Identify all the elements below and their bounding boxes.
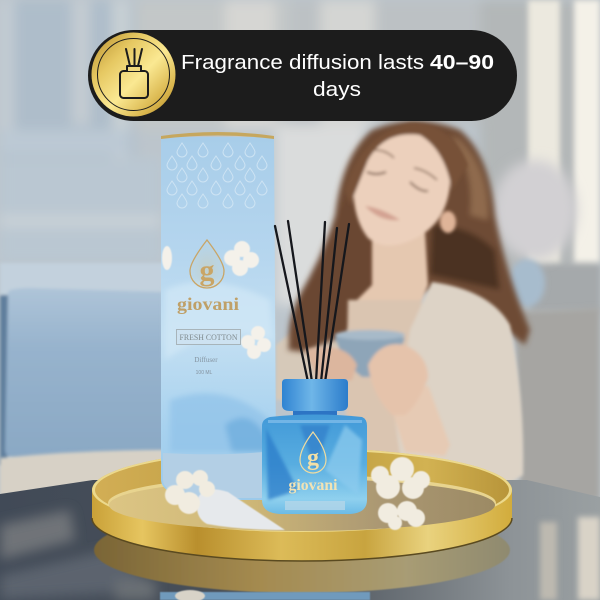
woman	[276, 121, 530, 490]
blouse	[345, 300, 422, 455]
callout pill	[88, 30, 517, 121]
ear	[440, 211, 456, 233]
tube logo letter: g	[200, 254, 214, 287]
sofa cream fabric	[0, 450, 165, 496]
callout text: Fragrance diffusion lasts	[181, 51, 424, 74]
hair back	[289, 121, 530, 350]
bottle brand: giovani	[288, 477, 338, 494]
tube label box	[176, 330, 240, 344]
icon: gold medallion	[92, 32, 176, 116]
hair front	[345, 123, 468, 205]
neck and chest	[352, 232, 428, 305]
bottle logo drop	[300, 432, 326, 473]
cotton flowers on tube	[162, 241, 271, 359]
tube label box: FRESH COTTON	[180, 333, 238, 342]
diffuser bottle	[262, 221, 367, 514]
tray reflection	[94, 507, 510, 593]
tube brand: giovani	[177, 294, 239, 314]
pattern of drops on lid	[167, 143, 267, 208]
face	[353, 130, 450, 246]
tube volume: 100 ML	[196, 370, 213, 376]
packaging tube	[161, 132, 276, 500]
logo drop	[190, 240, 224, 288]
arm	[392, 385, 450, 456]
reeds	[275, 221, 349, 382]
tray body	[92, 448, 512, 561]
sweater left	[276, 325, 345, 400]
cap	[282, 379, 348, 411]
sweater right	[395, 282, 523, 490]
mouth	[365, 206, 400, 220]
hands	[368, 344, 428, 415]
tube small text: Diffuser	[194, 356, 218, 364]
vase and flowers	[493, 160, 577, 307]
tube silk shading	[165, 282, 272, 452]
cotton and feather on tray	[165, 457, 430, 530]
hair left	[288, 190, 375, 352]
icon: diffuser	[120, 49, 148, 98]
brows and eyes	[375, 150, 394, 158]
callout text: 40–90	[430, 51, 494, 74]
sofa right	[515, 308, 600, 500]
glass body	[262, 414, 367, 514]
cup	[335, 332, 405, 377]
callout text: days	[313, 78, 361, 101]
table and tray	[0, 448, 600, 600]
callout text	[181, 51, 494, 101]
tube lower band	[163, 452, 266, 498]
bottle logo letter: g	[307, 445, 319, 471]
sofa left	[0, 263, 170, 465]
